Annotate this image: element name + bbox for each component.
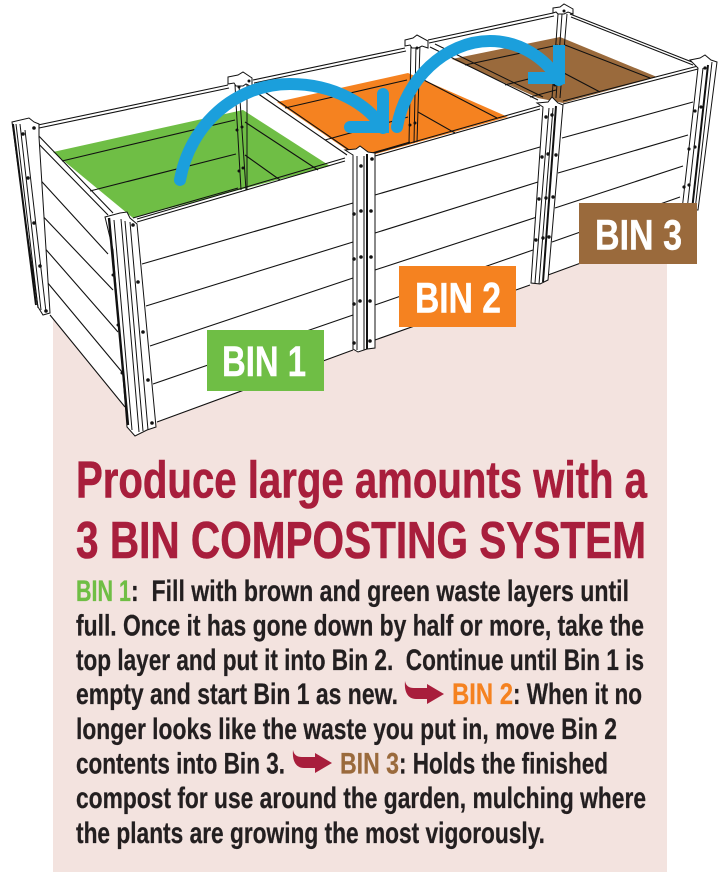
text block: instructions: : Holds the finished xyxy=(399,748,608,780)
text block: instructions: empty and start Bin 1 as new. xyxy=(76,678,398,711)
label: bin 3 xyxy=(579,203,697,264)
text block: instructions: BIN 3 xyxy=(340,748,399,780)
post: back middle 2 xyxy=(405,35,428,143)
text block: instructions xyxy=(76,575,646,850)
text block: instructions: : When it no xyxy=(513,678,642,711)
post: back left corner xyxy=(12,118,50,315)
floor: bin 3 brown xyxy=(452,37,657,103)
label: bin 3: BIN 3 xyxy=(595,212,682,260)
bin edges and plank lines xyxy=(28,13,698,422)
label: bin 1 xyxy=(207,330,324,391)
label: bin 2: BIN 2 xyxy=(415,274,501,322)
text block: instructions: BIN 1 xyxy=(76,575,131,608)
post: front right corner xyxy=(682,55,717,210)
post: back right xyxy=(552,4,573,98)
label: bin 1: BIN 1 xyxy=(222,338,306,386)
icon: arrow to bin 2 xyxy=(405,681,444,704)
text block: instructions: contents into Bin 3. xyxy=(76,748,285,780)
text block: instructions: the plants are growing the most vigorously. xyxy=(76,817,545,850)
bin silhouette xyxy=(12,8,716,436)
floor: bin 1 green xyxy=(53,110,330,218)
icon: arrow to bin 3 xyxy=(293,750,332,773)
arrow: bin 2 to bin 3 xyxy=(397,41,559,127)
post: front left corner xyxy=(105,212,156,436)
post: back middle 1 xyxy=(228,72,252,190)
text block: instructions: BIN 2 xyxy=(452,678,513,711)
label: bin 2 xyxy=(399,266,516,327)
post: front middle 1 xyxy=(345,146,375,352)
post: front middle 2 xyxy=(531,97,563,284)
arrow: bin 1 to bin 2 xyxy=(180,84,383,180)
floor: bin 2 orange xyxy=(277,73,508,155)
panel: pink background xyxy=(53,260,667,872)
illustration: three bin compost box xyxy=(12,4,717,436)
heading xyxy=(76,452,648,570)
